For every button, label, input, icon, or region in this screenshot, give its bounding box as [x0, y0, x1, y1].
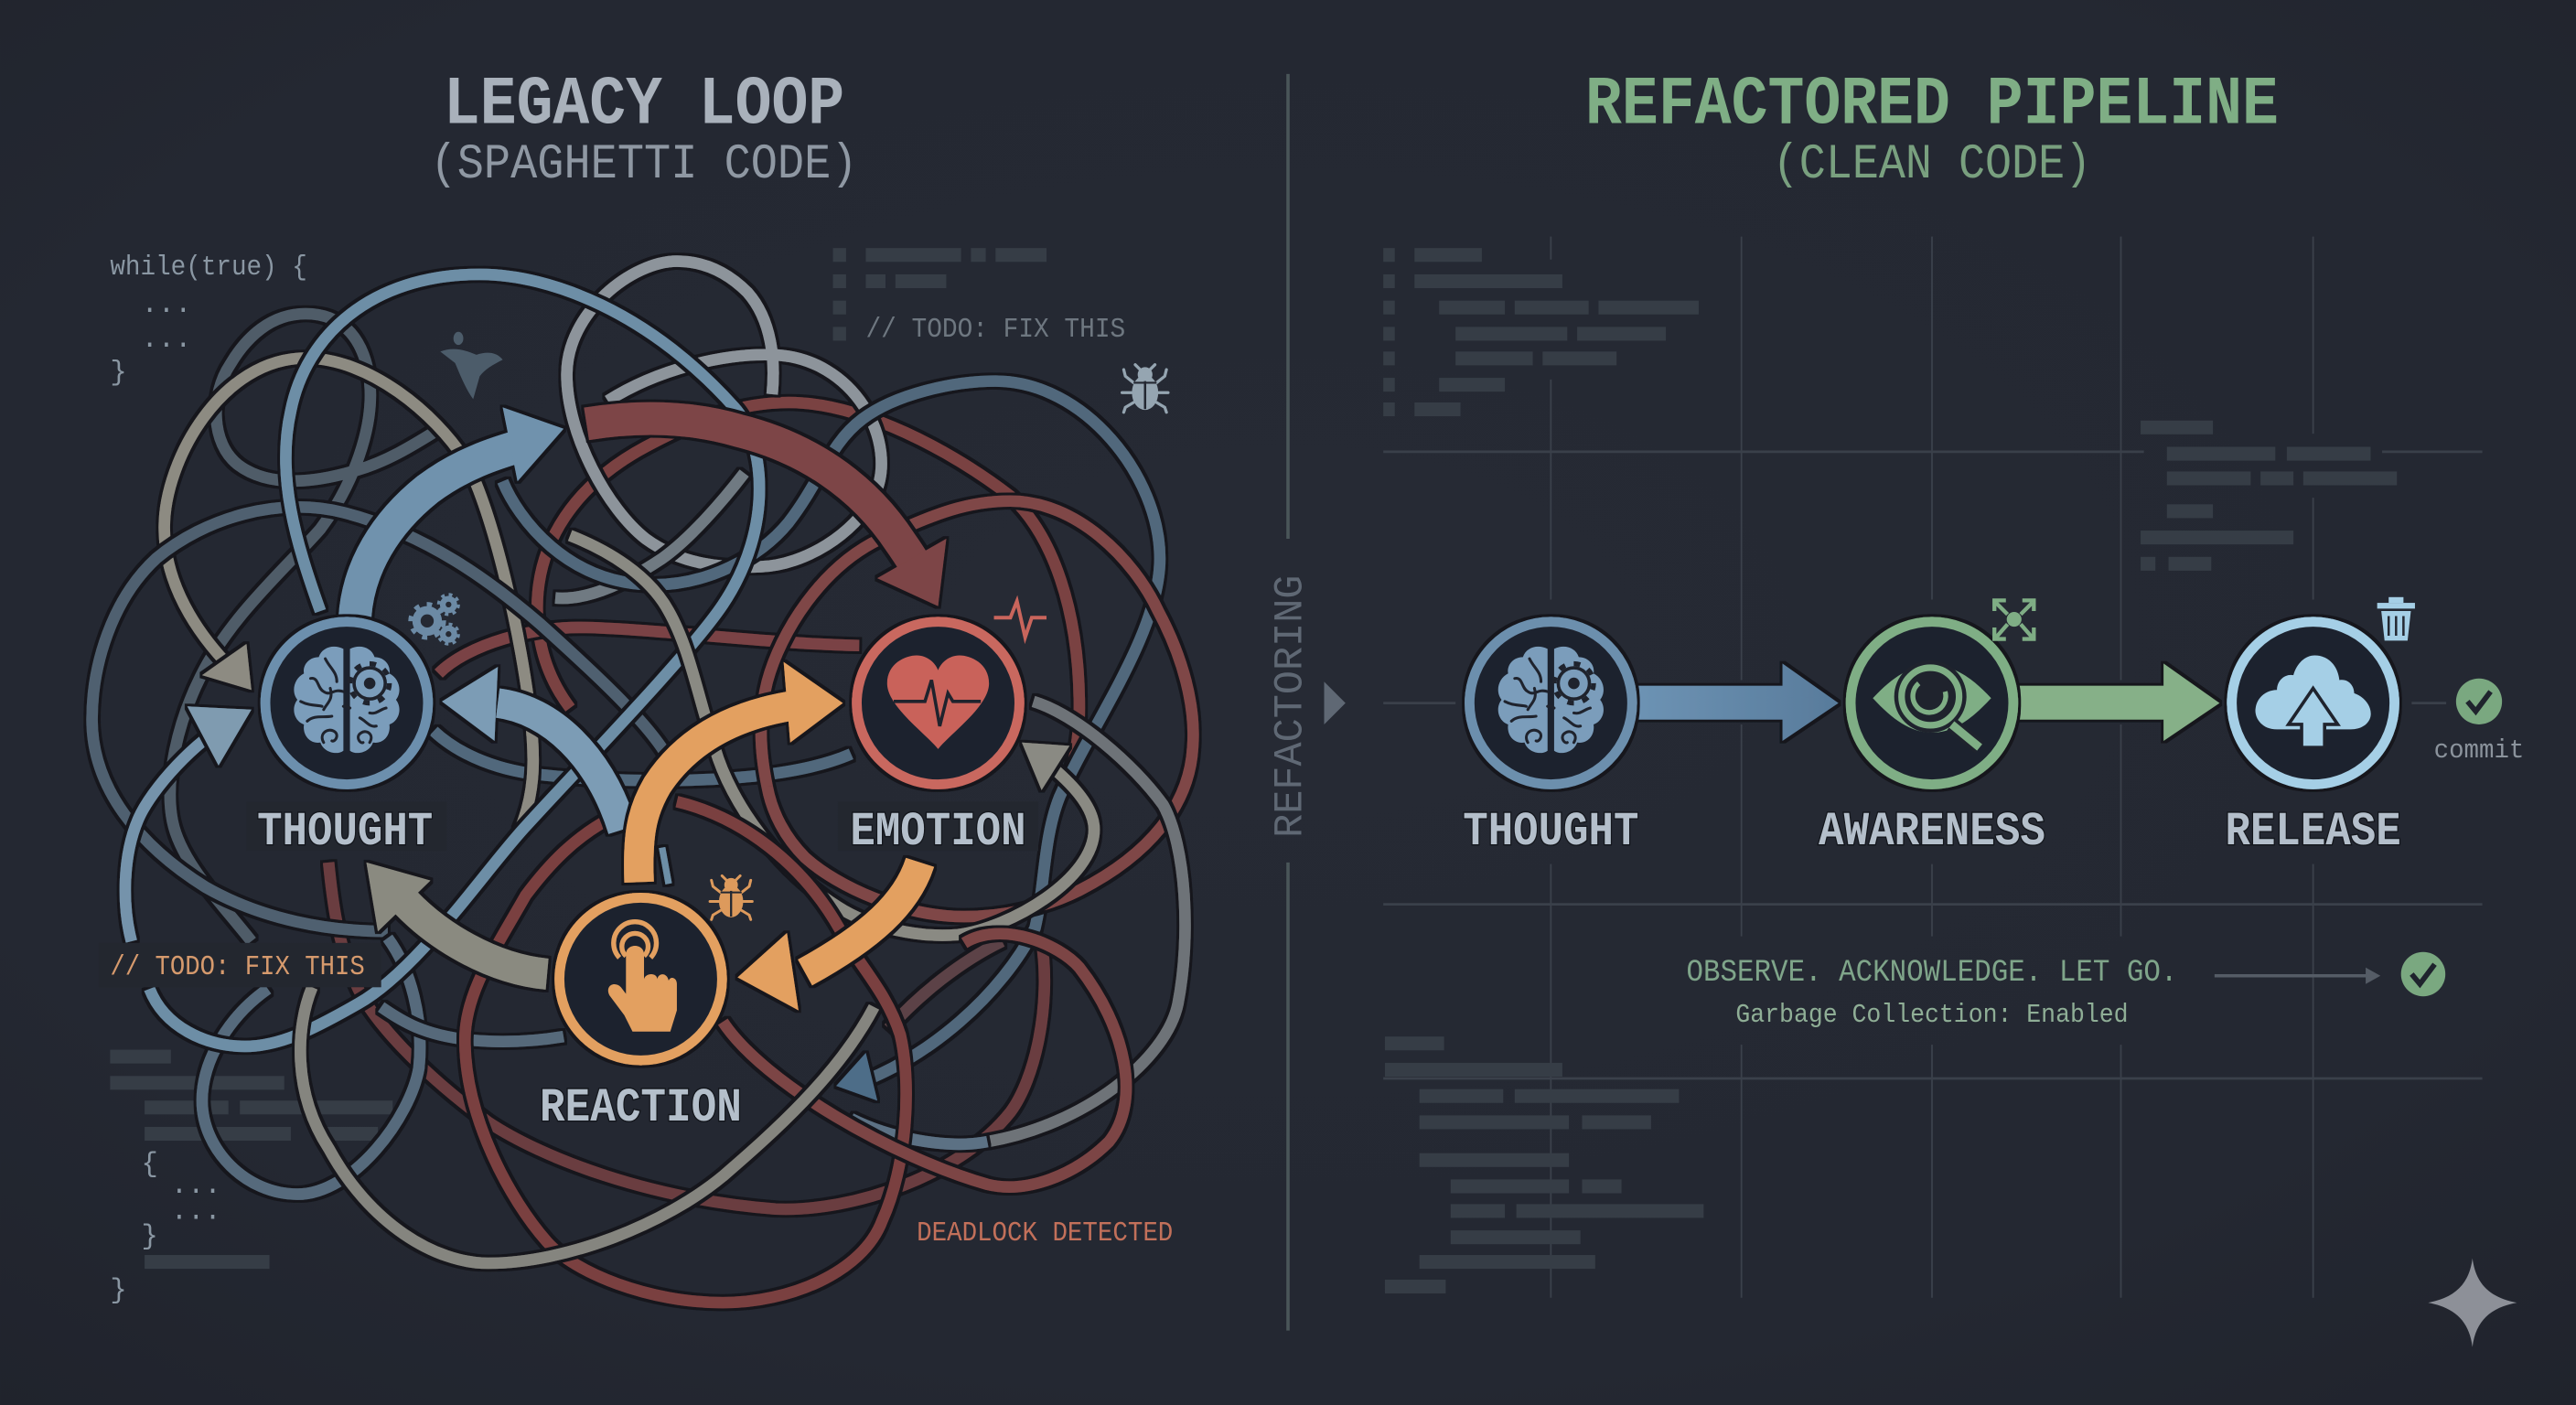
node: thought pipeline: THOUGHT: [1463, 805, 1638, 859]
arrow: red into emotion: [586, 419, 946, 606]
icon: gears near thought: [411, 595, 458, 644]
title: refactored pipeline: [1585, 66, 2279, 193]
icon: bird smudge: [440, 332, 503, 399]
code placeholder bars top right: [2141, 421, 2397, 571]
title: legacy loop: (SPAGHETTI CODE): [431, 137, 857, 193]
panel: refactored pipeline: [1383, 66, 2524, 1298]
code text: todo comment orange: // TODO: FIX THIS: [110, 952, 365, 983]
title: legacy loop: LEGACY LOOP: [444, 66, 844, 145]
node: thought: [246, 622, 447, 859]
arrowhead: tan into thought: [202, 644, 252, 690]
icon: focus target: [1994, 600, 2034, 639]
code placeholder bars bottom left: [110, 1050, 392, 1269]
spaghetti strands: [92, 262, 1193, 1303]
code text: while loop: ...: [141, 290, 191, 321]
node: reaction: REACTION: [540, 1081, 742, 1135]
icon: bug top right: [1122, 365, 1168, 413]
arrow: grey reaction to thought: [367, 863, 547, 974]
central divider: [1268, 74, 1346, 1331]
background grid: [1383, 237, 2483, 1298]
node: emotion: [838, 622, 1038, 859]
node: release: [2226, 622, 2401, 859]
arrow: thin to check: [2215, 968, 2380, 984]
status: deadlock detected: DEADLOCK DETECTED: [917, 1218, 1173, 1249]
code text: while loop: while(true) {: [110, 252, 307, 284]
code text: while loop: [110, 252, 307, 389]
icon: commit check: [2456, 679, 2502, 724]
icon: sparkle watermark: [2428, 1259, 2517, 1347]
arrowhead: grey into emotion: [1022, 743, 1069, 790]
panel: legacy loop: [92, 66, 1193, 1307]
node: thought: THOUGHT: [257, 805, 433, 859]
arrowhead: blue into thought: [188, 706, 252, 766]
code text: todo comment top: // TODO: FIX THIS: [865, 315, 1125, 346]
code text: lower braces: {: [141, 1149, 158, 1180]
node: awareness: [1819, 622, 2045, 859]
code text: lower braces: ...: [171, 1171, 221, 1202]
code placeholder bars top left: [1383, 248, 1699, 416]
arrow: blue back into thought: [442, 667, 623, 830]
arrow: orange reaction to emotion: [639, 662, 843, 882]
icon: success check: [2401, 952, 2445, 996]
arrow: divider triangle: [1325, 681, 1346, 724]
node: emotion: EMOTION: [850, 805, 1026, 859]
node: reaction: [540, 897, 742, 1135]
arrow: awareness to release: [2017, 664, 2219, 741]
label: refactoring: REFACTORING: [1268, 575, 1314, 838]
icon: trash can: [2377, 597, 2415, 640]
code text: lower braces: }: [110, 1276, 127, 1307]
subline: garbage collection: Garbage Collection: Enabled: [1735, 1000, 2129, 1030]
arrow: orange emotion to reaction: [737, 863, 920, 1010]
code text: todo comment orange: [99, 943, 381, 987]
tagline: observe acknowledge let go: OBSERVE. ACKNOWLEDGE. LET GO.: [1686, 956, 2177, 991]
title: refactored pipeline: REFACTORED PIPELINE: [1585, 66, 2279, 145]
code text: lower braces: ...: [171, 1197, 221, 1228]
code text: lower braces: }: [141, 1221, 158, 1252]
node: thought pipeline: [1463, 622, 1638, 859]
code placeholder bars bottom left: [1385, 1036, 1703, 1293]
arrowhead: steel blue at lower right: [836, 1053, 877, 1100]
title: legacy loop: [431, 66, 857, 193]
title: refactored pipeline: (CLEAN CODE): [1773, 137, 2091, 193]
code placeholder bars top right: [833, 248, 1046, 340]
label: commit: commit: [2434, 735, 2524, 766]
code text: lower braces: [110, 1149, 221, 1307]
code text: while loop: }: [110, 358, 127, 389]
code text: while loop: ...: [141, 325, 191, 356]
arrow: thought to emotion blue: [355, 407, 564, 617]
node: awareness: AWARENESS: [1819, 805, 2045, 859]
arrow: thought to awareness: [1635, 664, 1839, 741]
icon: pulse: [994, 601, 1046, 638]
node: release: RELEASE: [2226, 805, 2401, 859]
icon: bug near reaction: [710, 875, 752, 919]
